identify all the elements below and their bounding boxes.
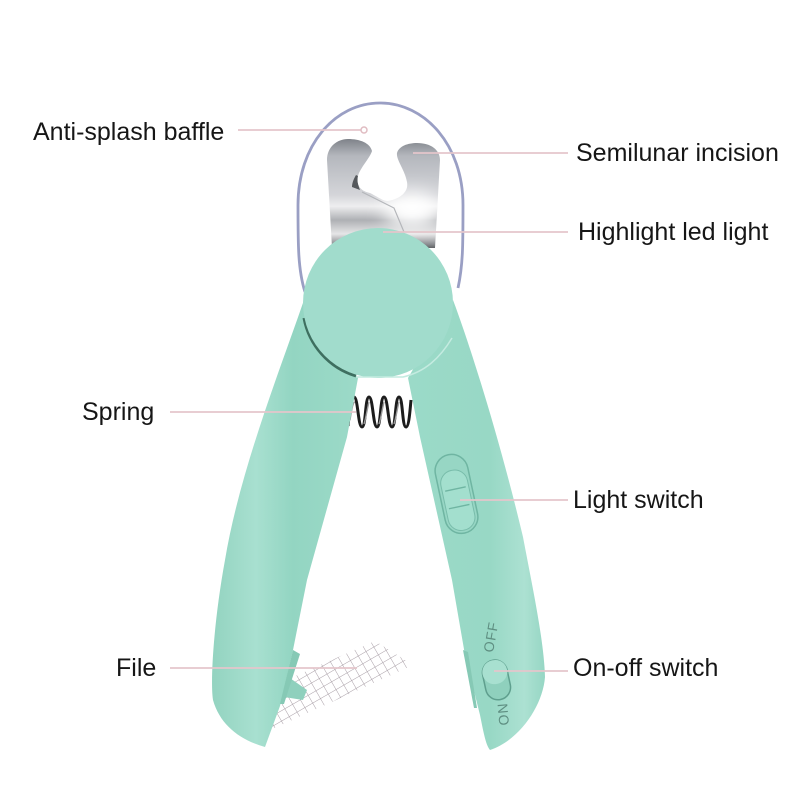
right handle	[408, 300, 545, 750]
label: Semilunar incision: Semilunar incision	[576, 139, 779, 167]
icon: metal blade	[327, 139, 440, 248]
label: Spring: Spring	[82, 398, 154, 426]
text: ON: ON	[494, 702, 512, 726]
icon: file with mesh	[268, 641, 413, 731]
pivot head circle	[303, 228, 453, 378]
leader: on-off switch	[494, 670, 568, 672]
icon: light switch	[432, 451, 481, 536]
leader: semilunar incision	[413, 152, 568, 154]
leader: light switch	[460, 499, 568, 501]
label: File: File	[116, 654, 156, 682]
label: Highlight led light: Highlight led light	[578, 218, 768, 246]
leader: spring	[170, 411, 356, 413]
icon: spring	[348, 397, 411, 427]
leader: highlight led light	[383, 231, 568, 233]
label: On-off switch: On-off switch	[573, 654, 718, 682]
leader: file	[170, 667, 357, 669]
left handle	[212, 300, 358, 747]
icon: anti-splash baffle	[298, 103, 463, 292]
leader: anti-splash baffle	[238, 127, 367, 133]
text: OFF: OFF	[480, 620, 501, 654]
label: Anti-splash baffle: Anti-splash baffle	[33, 118, 224, 146]
label: Light switch: Light switch	[573, 486, 704, 514]
icon: on-off switch	[480, 620, 513, 726]
